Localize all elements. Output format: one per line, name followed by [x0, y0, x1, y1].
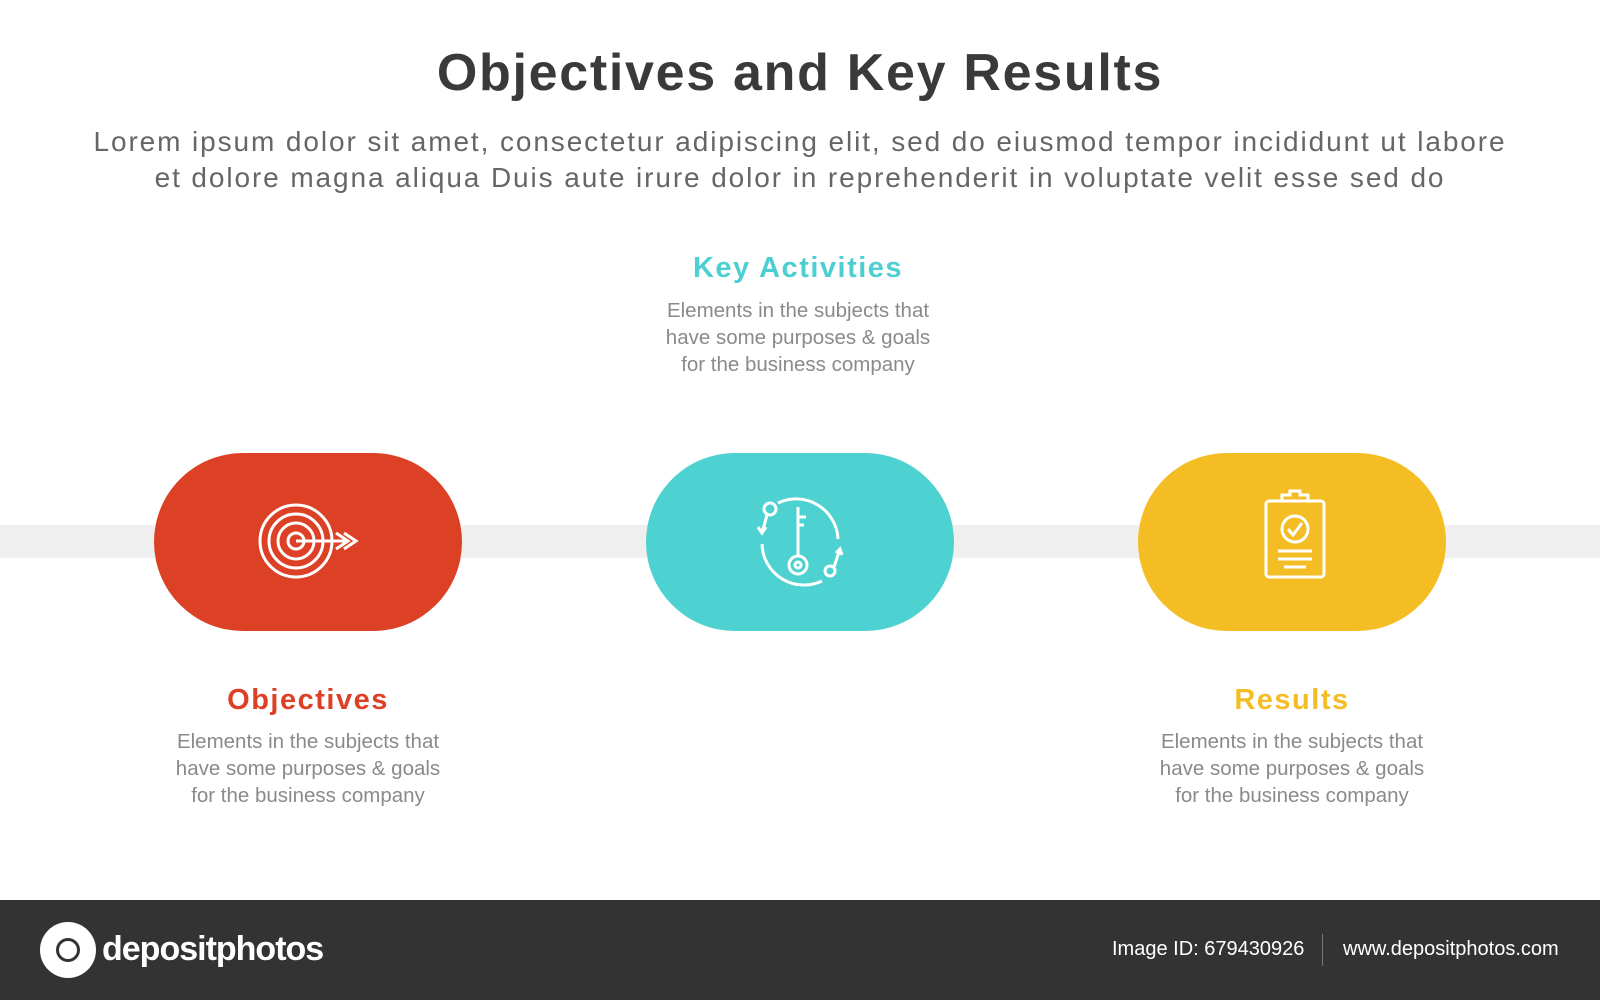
text: key activities: have some purposes & goals	[666, 326, 930, 349]
text: objectives: Elements in the subjects that	[177, 730, 439, 753]
pill: objectives	[154, 453, 462, 631]
footer logo: depositphotos	[102, 930, 323, 968]
pill: key activities	[646, 453, 954, 631]
footer id: Image ID: 679430926	[1112, 938, 1304, 960]
text: key activities: for the business company	[681, 353, 915, 376]
heading: results: Results	[1234, 684, 1350, 716]
text: objectives	[176, 730, 440, 807]
title: Objectives and Key Results	[437, 44, 1163, 102]
subtitle: Lorem ipsum dolor sit amet, consectetur adipiscing elit, sed do eiusmod tempor incididunt ut labore	[94, 126, 1506, 157]
text: results	[1160, 730, 1424, 807]
footer bar	[0, 900, 1600, 1000]
heading: key activities: Key Activities	[693, 252, 903, 284]
footer url: www.depositphotos.com	[1343, 938, 1559, 960]
pill: results	[1138, 453, 1446, 631]
text: results: have some purposes & goals	[1160, 757, 1424, 780]
heading: objectives: Objectives	[227, 684, 389, 716]
icon: key cycle	[756, 497, 844, 586]
subtitle: et dolore magna aliqua Duis aute irure dolor in reprehenderit in voluptate velit esse sed do	[155, 162, 1445, 193]
footer logo	[40, 922, 323, 978]
text: key activities: Elements in the subjects that	[667, 299, 929, 322]
icon: clipboard	[1264, 490, 1326, 578]
subtitle	[94, 126, 1506, 193]
text: results: for the business company	[1175, 784, 1409, 807]
text: key activities	[666, 299, 930, 376]
text: results: Elements in the subjects that	[1161, 730, 1423, 753]
text: objectives: for the business company	[191, 784, 425, 807]
icon: target	[258, 504, 359, 578]
timeline band	[0, 525, 1600, 558]
text: objectives: have some purposes & goals	[176, 757, 440, 780]
